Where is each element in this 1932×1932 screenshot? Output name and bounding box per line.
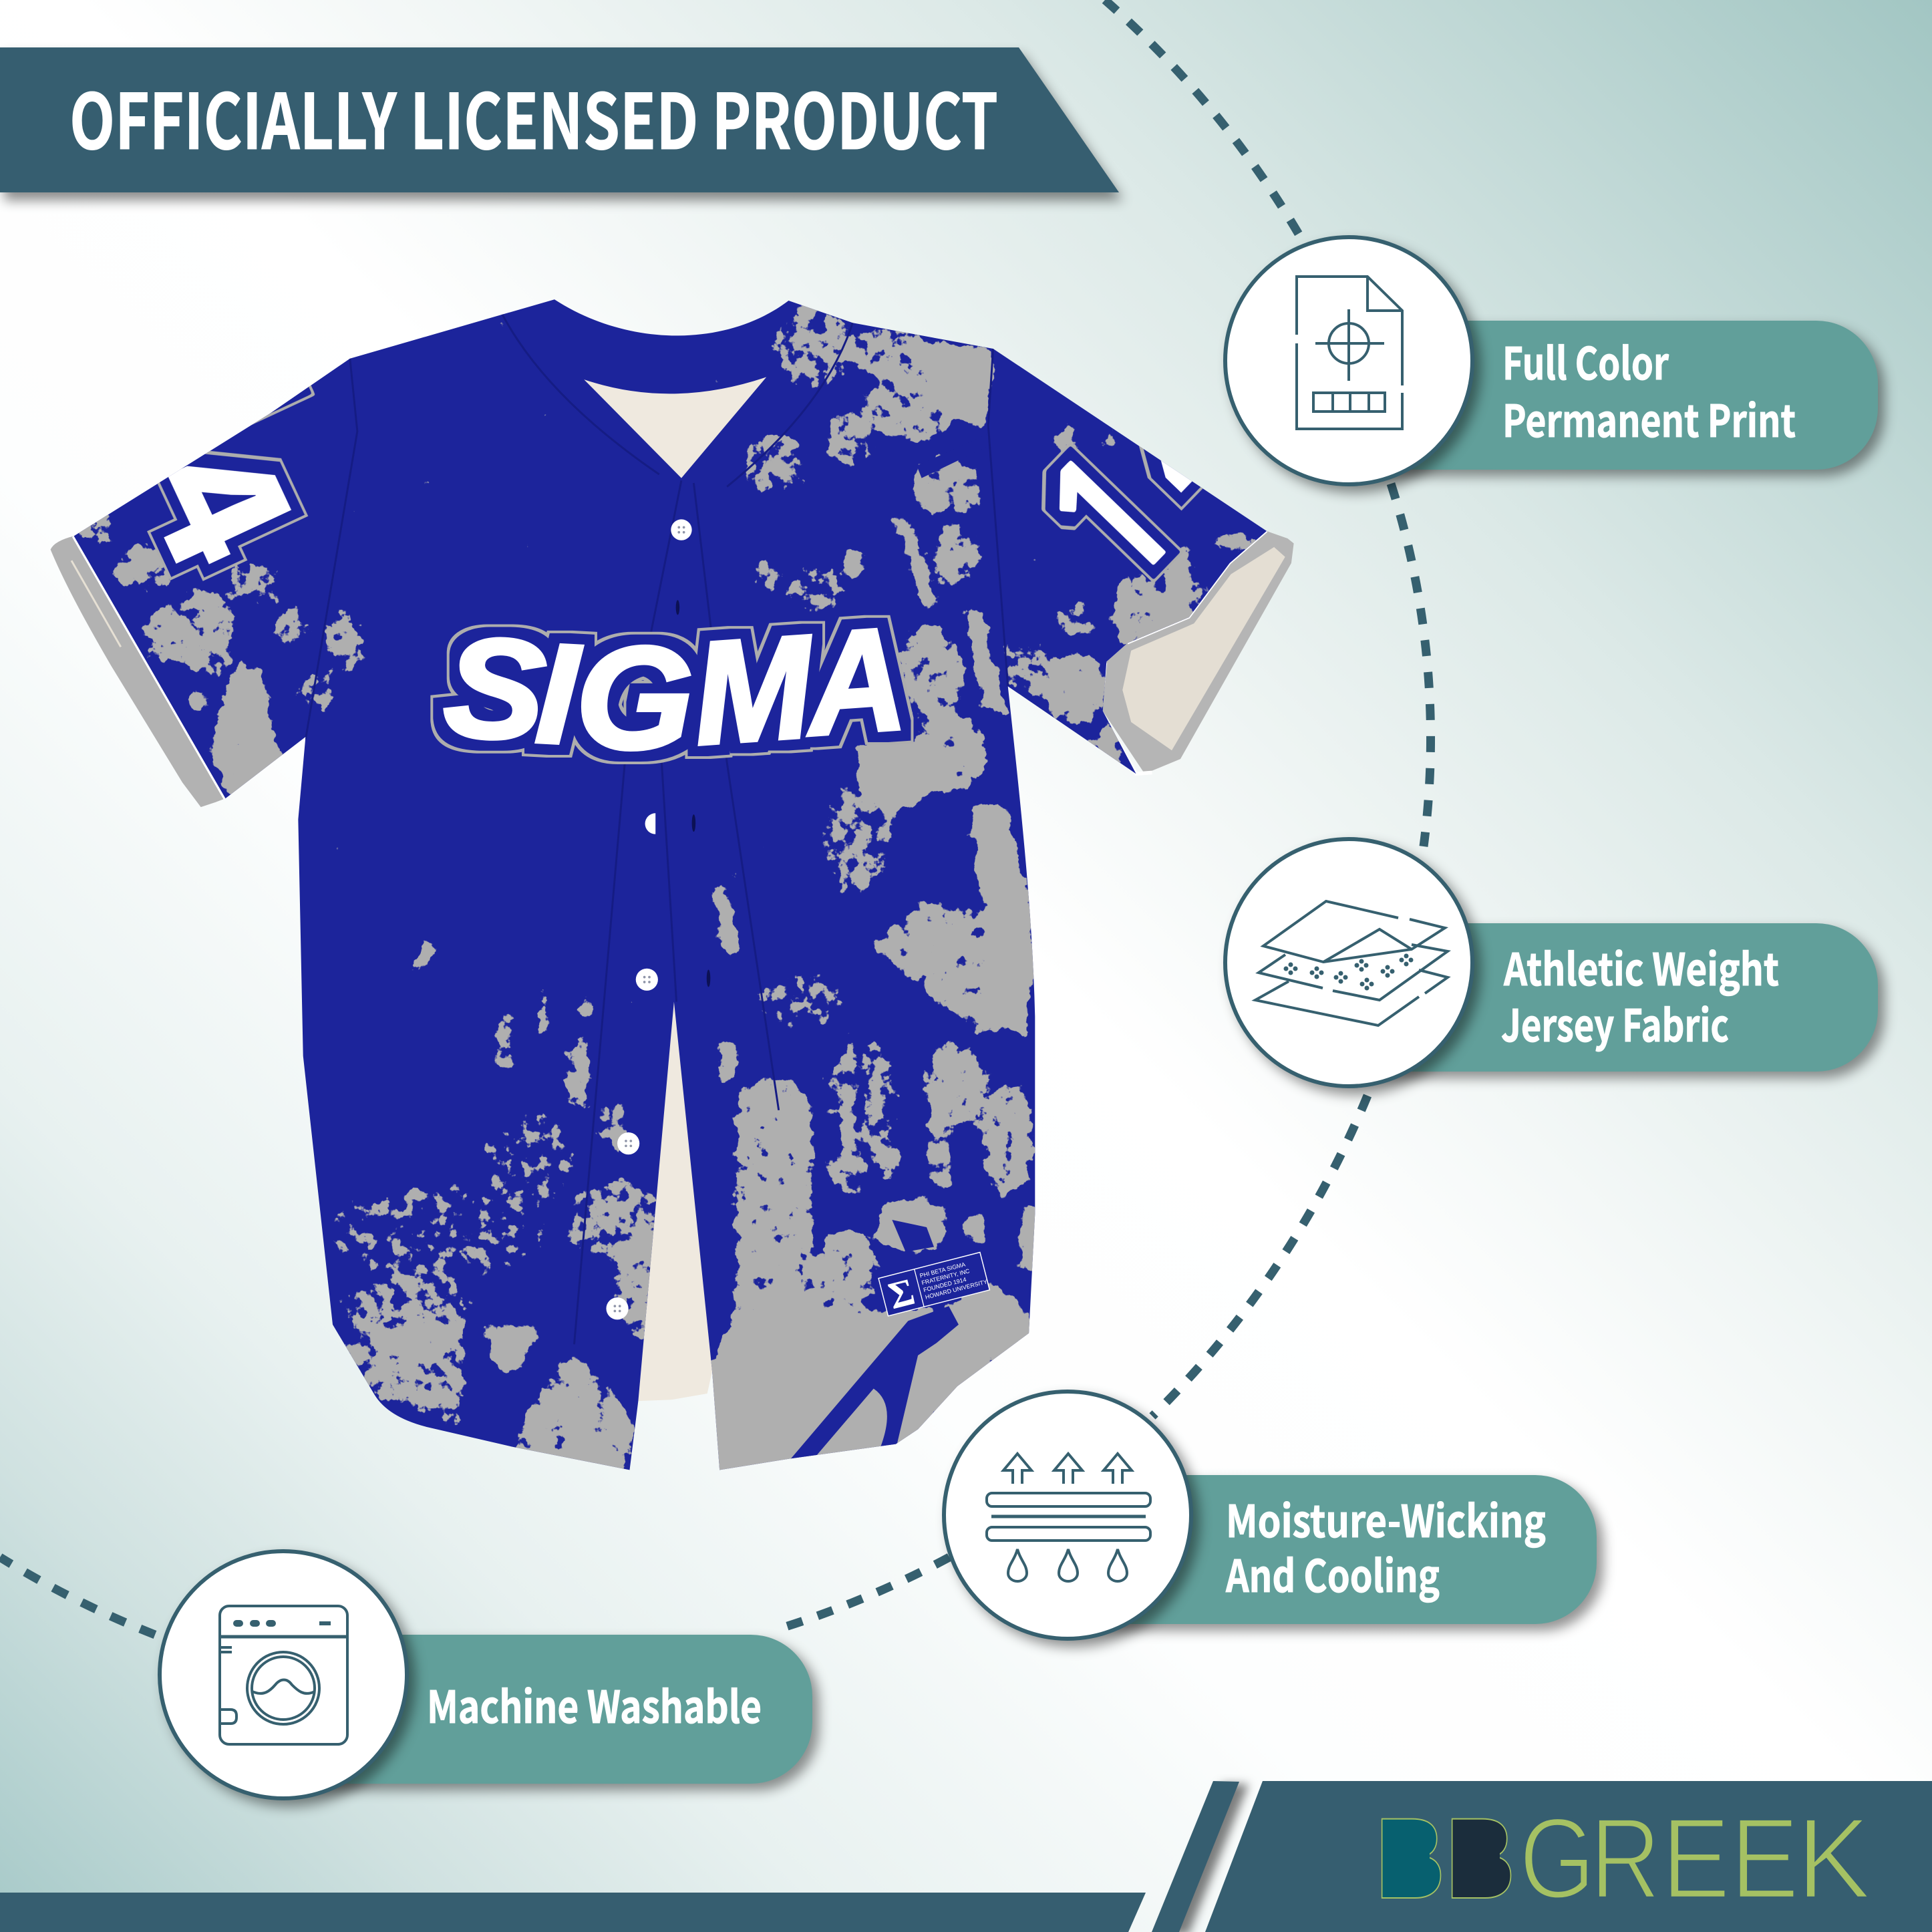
- jersey: [51, 299, 1293, 1470]
- feature: athletic weight fabric: [1225, 839, 1878, 1086]
- feature: machine washable: [160, 1551, 812, 1798]
- hem tag: FRATERNITY, INC: [921, 1267, 971, 1286]
- large isolated spots: [712, 880, 740, 955]
- BBGREEK logo: [1376, 1794, 1871, 1923]
- icon: fabric layers: [1255, 901, 1448, 1025]
- jersey body: [73, 299, 1267, 1470]
- circle: [944, 1392, 1191, 1639]
- logo B teal: B: [1376, 1794, 1445, 1923]
- SIGMA chest lettering: A: [799, 597, 911, 766]
- footer bands: [0, 1781, 1932, 1932]
- left sleeve cuff: [51, 536, 226, 807]
- title text: OFFICIALLY LICENSED PRODUCT: [69, 61, 998, 171]
- sleeve number right: [1015, 299, 1310, 618]
- SIGMA chest lettering: I: [533, 613, 584, 774]
- logo wordmark: E: [1730, 1794, 1799, 1923]
- SIGMA chest lettering: M: [688, 605, 820, 776]
- dashed connector ring: [0, 0, 1431, 1635]
- feature: full color print: [1225, 237, 1878, 484]
- logo wordmark: [1519, 1794, 1871, 1923]
- label: [1501, 935, 1779, 1055]
- label: And Cooling: [1225, 1541, 1440, 1605]
- sleeve number left: 4: [93, 399, 367, 603]
- logo wordmark: R: [1590, 1794, 1661, 1923]
- icon: washing machine: [220, 1606, 347, 1744]
- hem tag: [878, 1252, 991, 1319]
- label: Permanent Print: [1502, 386, 1796, 450]
- pill: [283, 1635, 812, 1784]
- icon buttons: [233, 1620, 276, 1627]
- grunge pattern: [74, 301, 1257, 1472]
- right oval lobes: [891, 512, 939, 611]
- garment seams: [305, 308, 1008, 1344]
- title banner: [0, 47, 1119, 192]
- lower left speckles: [565, 1180, 668, 1264]
- V-neck lining: [584, 377, 766, 478]
- pill: [1348, 321, 1878, 470]
- logo B navy: B: [1446, 1794, 1515, 1923]
- label: [1502, 329, 1796, 450]
- hem tag: Σ: [884, 1271, 919, 1317]
- label: Jersey Fabric: [1501, 991, 1729, 1055]
- inner back lining: [638, 998, 712, 1401]
- sleeve number right: 4: [1054, 299, 1310, 551]
- SIGMA chest lettering: [441, 597, 911, 780]
- circle: [160, 1551, 407, 1798]
- logo wordmark: G: [1519, 1794, 1595, 1923]
- SIGMA chest lettering: S: [441, 607, 549, 770]
- hem tag: HOWARD UNIVERSITY: [925, 1278, 988, 1301]
- left sleeve speckles: [74, 511, 114, 548]
- pill: [1068, 1475, 1597, 1624]
- label: Machine Washable: [427, 1672, 762, 1736]
- blue branch veins: [788, 434, 988, 1461]
- label: [1225, 1486, 1546, 1605]
- sleeve number right: 1: [1015, 422, 1213, 618]
- hem tag: FOUNDED 1914: [923, 1276, 967, 1293]
- logo wordmark: K: [1796, 1794, 1871, 1923]
- label: Athletic Weight: [1503, 935, 1779, 999]
- icon: print file: [1297, 277, 1402, 429]
- pill: [1348, 923, 1878, 1072]
- label: Moisture-Wicking: [1226, 1486, 1546, 1551]
- upper right speckles: [919, 343, 993, 426]
- SIGMA chest lettering: G: [576, 617, 693, 780]
- feature: moisture wicking: [944, 1392, 1597, 1639]
- jersey buttons: [606, 519, 710, 1319]
- circle: [1225, 839, 1472, 1086]
- logo wordmark: E: [1661, 1794, 1730, 1923]
- right sleeve speckles: [1055, 426, 1082, 458]
- right sleeve cuff and lining: [1100, 531, 1294, 774]
- lower right bands: [924, 1042, 988, 1126]
- label: Full Color: [1502, 329, 1669, 393]
- hem tag: PHI BETA SIGMA: [919, 1261, 966, 1279]
- sleeve number left: 1: [126, 323, 328, 492]
- icon: wicking layers: [987, 1454, 1150, 1581]
- icon dots: [1284, 954, 1414, 990]
- circle: [1225, 237, 1472, 484]
